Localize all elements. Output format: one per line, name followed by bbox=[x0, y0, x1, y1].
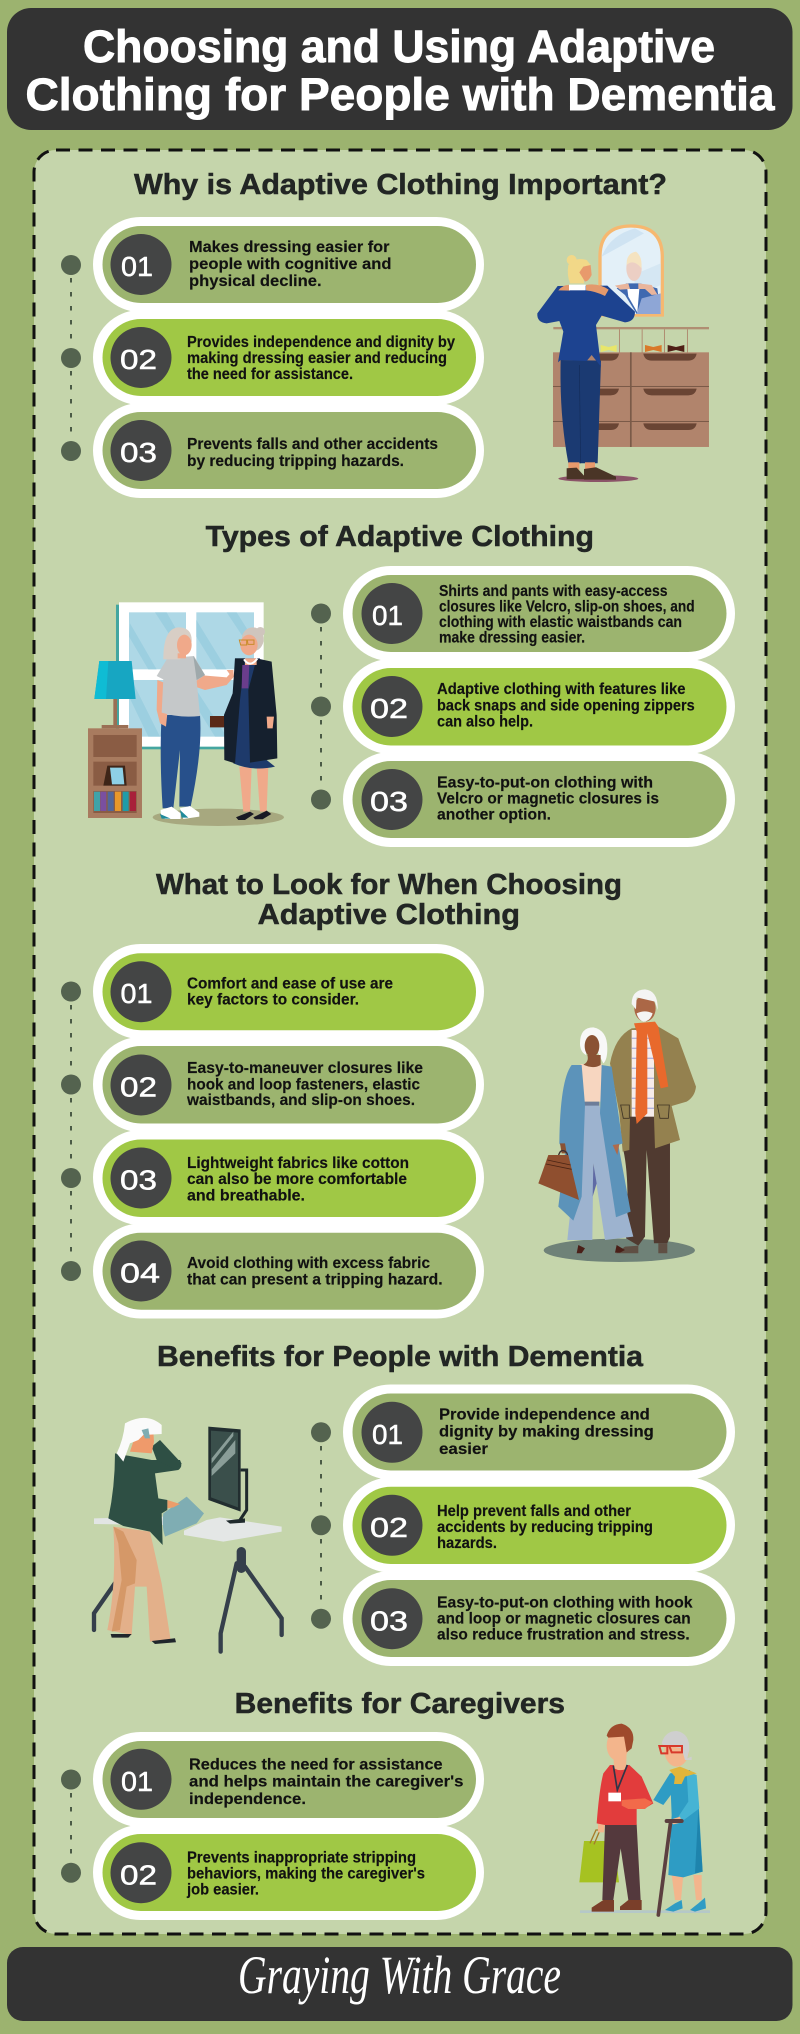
timeline bbox=[61, 255, 81, 461]
title banner bbox=[7, 8, 792, 130]
item 01: key factors to consider. bbox=[187, 991, 359, 1008]
item 03: 03 bbox=[120, 437, 157, 468]
item 02 bbox=[343, 659, 735, 754]
item 01: make dressing easier. bbox=[439, 630, 585, 647]
item 01: and helps maintain the caregiver's bbox=[189, 1774, 464, 1791]
item 03: by reducing tripping hazards. bbox=[187, 453, 404, 470]
item 04: that can present a tripping hazard. bbox=[187, 1272, 443, 1289]
item 01: Provide independence and bbox=[439, 1406, 650, 1423]
item 02: 02 bbox=[370, 693, 408, 724]
item 01: people with cognitive and bbox=[189, 256, 392, 273]
item 03: 03 bbox=[370, 786, 408, 817]
item 02: waistbands, and slip-on shoes. bbox=[186, 1092, 415, 1109]
item 01: 01 bbox=[372, 600, 403, 631]
item 03: Lightweight fabrics like cotton bbox=[187, 1155, 409, 1172]
item 03: Velcro or magnetic closures is bbox=[437, 791, 659, 808]
illustration: woman at standing desk bbox=[94, 1418, 282, 1652]
title banner: Clothing for People with Dementia bbox=[26, 69, 775, 120]
item 01: 01 bbox=[120, 978, 152, 1009]
item 01: independence. bbox=[189, 1791, 306, 1808]
item 01 bbox=[93, 944, 484, 1039]
item 01: physical decline. bbox=[189, 273, 322, 290]
item 03 bbox=[93, 1130, 484, 1225]
section: types of adaptive clothing bbox=[88, 521, 735, 847]
item 03: Easy-to-put-on clothing with hook bbox=[437, 1595, 693, 1612]
item 03: can also be more comfortable bbox=[187, 1171, 407, 1188]
item 02 bbox=[343, 1478, 735, 1572]
item 03: 03 bbox=[120, 1164, 157, 1196]
item 01: closures like Velcro, slip-on shoes, and bbox=[439, 599, 695, 616]
item 02: Easy-to-maneuver closures like bbox=[187, 1060, 423, 1077]
item 01: Shirts and pants with easy-access bbox=[439, 583, 668, 600]
item 03: also reduce frustration and stress. bbox=[437, 1627, 690, 1644]
item 01 bbox=[343, 566, 735, 661]
item 02: Provides independence and dignity by bbox=[187, 334, 455, 351]
item 01 bbox=[93, 217, 484, 312]
item 01: 01 bbox=[121, 1766, 153, 1797]
heading: Types of Adaptive Clothing bbox=[206, 521, 594, 553]
item 01: Comfort and ease of use are bbox=[187, 975, 393, 992]
timeline bbox=[61, 1770, 81, 1883]
illustration: caregiver walking with older woman bbox=[579, 1724, 710, 1915]
item 02: Help prevent falls and other bbox=[437, 1503, 631, 1520]
item 03: and breathable. bbox=[187, 1188, 305, 1205]
item 02: Adaptive clothing with features like bbox=[437, 681, 686, 698]
section: what to look for: Adaptive Clothing bbox=[258, 899, 520, 931]
item 02: behaviors, making the caregiver's bbox=[187, 1865, 425, 1882]
item 02 bbox=[93, 1037, 484, 1132]
illustration: older couple bbox=[538, 989, 696, 1262]
item 03 bbox=[93, 403, 484, 498]
item 02: making dressing easier and reducing bbox=[187, 350, 447, 367]
item 02: hook and loop fasteners, elastic bbox=[187, 1077, 420, 1094]
item 01: Reduces the need for assistance bbox=[189, 1756, 443, 1773]
item 02: 02 bbox=[120, 344, 157, 375]
item 03: Easy-to-put-on clothing with bbox=[437, 775, 653, 792]
item 03 bbox=[343, 752, 735, 847]
section: why is adaptive clothing important bbox=[61, 169, 709, 498]
footer banner: Graying With Grace bbox=[238, 1945, 561, 2005]
illustration: person at mirror and dresser bbox=[537, 224, 709, 482]
item 04 bbox=[93, 1224, 484, 1318]
item 03: another option. bbox=[437, 807, 551, 824]
timeline bbox=[61, 982, 81, 1281]
item 02: 02 bbox=[370, 1512, 408, 1543]
item 02: back snaps and side opening zippers bbox=[437, 698, 695, 715]
footer banner bbox=[7, 1945, 792, 2021]
section: benefits for people with dementia bbox=[94, 1341, 735, 1666]
item 01: 01 bbox=[121, 251, 153, 282]
item 03: Prevents falls and other accidents bbox=[187, 436, 438, 453]
item 02: 02 bbox=[120, 1072, 157, 1102]
item 03 bbox=[343, 1571, 735, 1666]
timeline bbox=[311, 604, 331, 810]
section: what to look for bbox=[61, 869, 696, 1318]
item 04: 04 bbox=[120, 1258, 160, 1288]
section: benefits for caregivers bbox=[61, 1688, 710, 1920]
item 02: the need for assistance. bbox=[187, 366, 353, 383]
item 01: easier bbox=[439, 1441, 488, 1458]
item 01: 01 bbox=[372, 1419, 403, 1450]
item 01 bbox=[343, 1384, 735, 1480]
item 03: 03 bbox=[370, 1605, 408, 1636]
item 01: dignity by making dressing bbox=[439, 1424, 654, 1441]
item 02: Prevents inappropriate stripping bbox=[187, 1849, 416, 1866]
item 02 bbox=[93, 310, 484, 405]
heading: Benefits for People with Dementia bbox=[157, 1341, 644, 1373]
heading: Benefits for Caregivers bbox=[235, 1688, 565, 1720]
heading: What to Look for When Choosing bbox=[156, 869, 622, 901]
item 01: clothing with elastic waistbands can bbox=[439, 614, 682, 631]
item 02: accidents by reducing tripping bbox=[437, 1519, 653, 1536]
timeline bbox=[311, 1422, 331, 1629]
item 02: can also help. bbox=[437, 714, 533, 731]
heading: Why is Adaptive Clothing Important? bbox=[134, 169, 667, 201]
item 03: and loop or magnetic closures can bbox=[437, 1611, 691, 1628]
item 04: Avoid clothing with excess fabric bbox=[187, 1255, 430, 1272]
item 02: 02 bbox=[120, 1859, 157, 1890]
illustration: two women by window bbox=[88, 602, 284, 826]
item 02: hazards. bbox=[437, 1535, 497, 1552]
title banner: Choosing and Using Adaptive bbox=[83, 21, 715, 72]
item 01 bbox=[93, 1732, 484, 1827]
item 02 bbox=[93, 1825, 484, 1920]
item 01: Makes dressing easier for bbox=[189, 239, 390, 256]
item 02: job easier. bbox=[186, 1881, 259, 1898]
